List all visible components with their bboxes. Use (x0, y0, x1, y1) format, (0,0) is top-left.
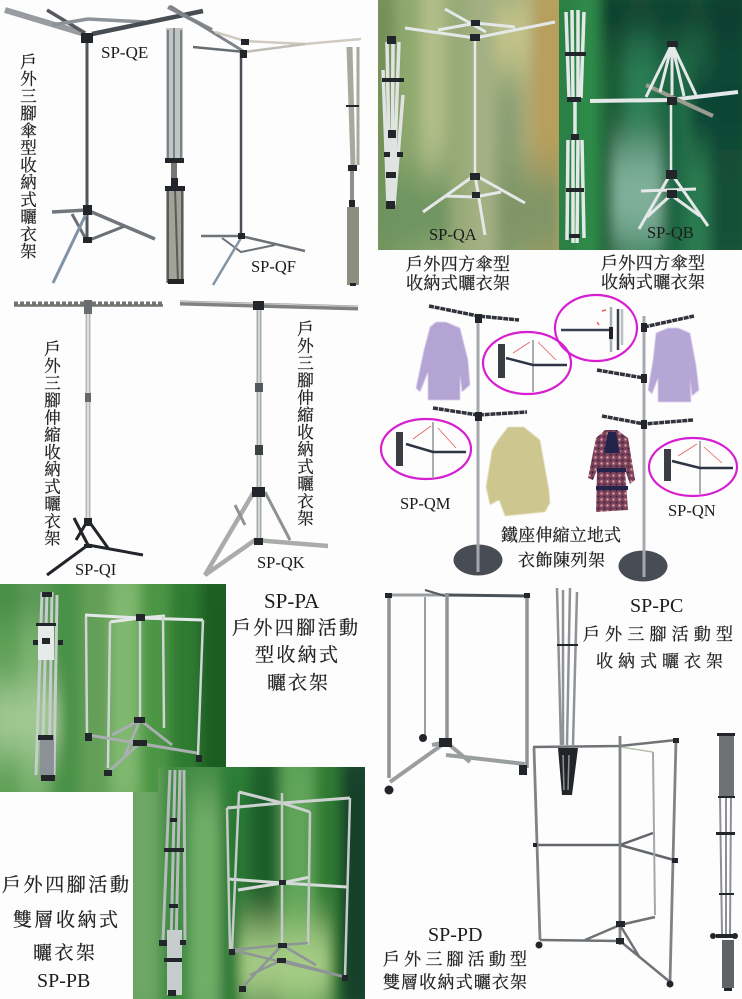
label: SP-QK: SP-QK (257, 553, 305, 572)
panel: SP-PA (0, 584, 226, 792)
caption: display stands: 鐵座伸縮立地式 (501, 526, 621, 545)
garment: lavender shirt left (416, 322, 470, 400)
caption: SP-PA: 型收納式 (255, 644, 338, 666)
label: SP-QN: SP-QN (668, 501, 716, 520)
product: SP-QA rack (405, 9, 555, 235)
caption: SP-QB: 戶外四方傘型 (601, 254, 705, 273)
product: SP-QK rack (180, 301, 358, 575)
vertical heading: SP-QK: 戶外三腳伸縮收納式曬衣架 (294, 320, 314, 526)
caption: SP-PC: 收納式曬衣架 (596, 652, 723, 671)
product: SP-QA folded (382, 36, 404, 209)
panel: SP-QE and SP-QF three-leg umbrella racks (5, 6, 361, 286)
label: SP-QI: SP-QI (75, 560, 116, 579)
product: SP-QE folded (165, 28, 185, 284)
caption: SP-QA (406, 255, 510, 293)
caption: display stands: 衣飾陳列架 (518, 551, 605, 570)
callout: magnifier hook detail (555, 295, 637, 361)
product: SP-QI rack (14, 300, 163, 575)
product: SP-PC rack (384, 590, 530, 794)
caption: SP-PD: SP-PD (428, 924, 482, 946)
vertical heading: SP-QI: 戶外三腳伸縮收納式曬衣架 (42, 340, 61, 546)
panel: SP-QA (378, 0, 559, 250)
garment: beige jacket (486, 427, 550, 516)
product: SP-PA folded (33, 592, 63, 781)
callout: magnifier QM upper (483, 332, 571, 394)
product: SP-QN stand (597, 316, 694, 582)
caption: SP-QB (601, 254, 705, 292)
label: SP-QA: SP-QA (429, 225, 477, 244)
caption: SP-PB (2, 874, 129, 992)
caption: SP-PC (583, 595, 733, 671)
garment: floral dress (588, 430, 635, 512)
caption: SP-QA: 戶外四方傘型 (406, 255, 510, 274)
caption: display stands (501, 526, 621, 570)
caption: SP-PB: 曬衣架 (33, 942, 95, 964)
product: SP-QE rack (5, 7, 212, 283)
label: SP-QE: SP-QE (101, 43, 148, 62)
panel: SP-PC (384, 588, 733, 795)
garment: lavender shirt right (648, 328, 699, 402)
caption: SP-PB: SP-PB (37, 970, 90, 992)
product: SP-PD rack (533, 736, 679, 988)
background: blurred olive green (378, 0, 559, 250)
callout: magnifier QN (649, 438, 737, 496)
caption: SP-PC: SP-PC (630, 595, 683, 617)
caption: SP-PD: 戶外三腳活動型 (383, 950, 527, 969)
label: SP-QB: SP-QB (647, 223, 694, 242)
product: SP-PB folded (159, 770, 186, 996)
caption: SP-PA: 戶外四腳活動 (232, 617, 358, 639)
product: SP-QF rack (170, 6, 361, 285)
panel: SP-QI telescopic rack (14, 300, 163, 579)
panel: SP-PD (383, 733, 738, 992)
caption: SP-PD: 雙層收納式曬衣架 (383, 973, 527, 992)
caption: SP-PB: 雙層收納式 (13, 909, 118, 931)
product: SP-PD folded (710, 733, 738, 991)
product: SP-QM stand (429, 306, 527, 576)
caption: SP-QB: 收納式曬衣架 (601, 273, 705, 292)
product: SP-QB rack (590, 41, 738, 229)
product: SP-PC folded (557, 588, 578, 795)
product: SP-PB rack (227, 792, 350, 992)
background: blurred deep green (133, 767, 365, 999)
panel: SP-QM and SP-QN display stands (381, 295, 737, 582)
caption: SP-PB: 戶外四腳活動 (2, 874, 129, 896)
vertical heading: SP-QE group: 戶外三腳傘型收納式曬衣架 (18, 53, 37, 259)
caption: SP-QA: 收納式曬衣架 (406, 274, 510, 293)
panel: SP-PB (133, 767, 365, 999)
panel: SP-QK telescopic rack (180, 301, 358, 575)
callout: magnifier QM lower (381, 419, 471, 479)
caption: SP-PA: 曬衣架 (267, 672, 328, 694)
caption: SP-PD (383, 924, 527, 992)
caption: SP-PA: SP-PA (264, 589, 320, 613)
product: SP-QB folded (565, 10, 586, 243)
panel: SP-QB (559, 0, 742, 250)
caption: SP-PC: 戶外三腳活動型 (583, 625, 733, 644)
background: blurred dark green (559, 0, 742, 250)
background: blurred green (0, 584, 226, 792)
label: SP-QM: SP-QM (400, 494, 451, 513)
caption: SP-PA (232, 589, 358, 694)
product: SP-QF folded (346, 47, 359, 286)
label: SP-QF: SP-QF (251, 257, 296, 276)
product: SP-PA rack (85, 614, 203, 776)
